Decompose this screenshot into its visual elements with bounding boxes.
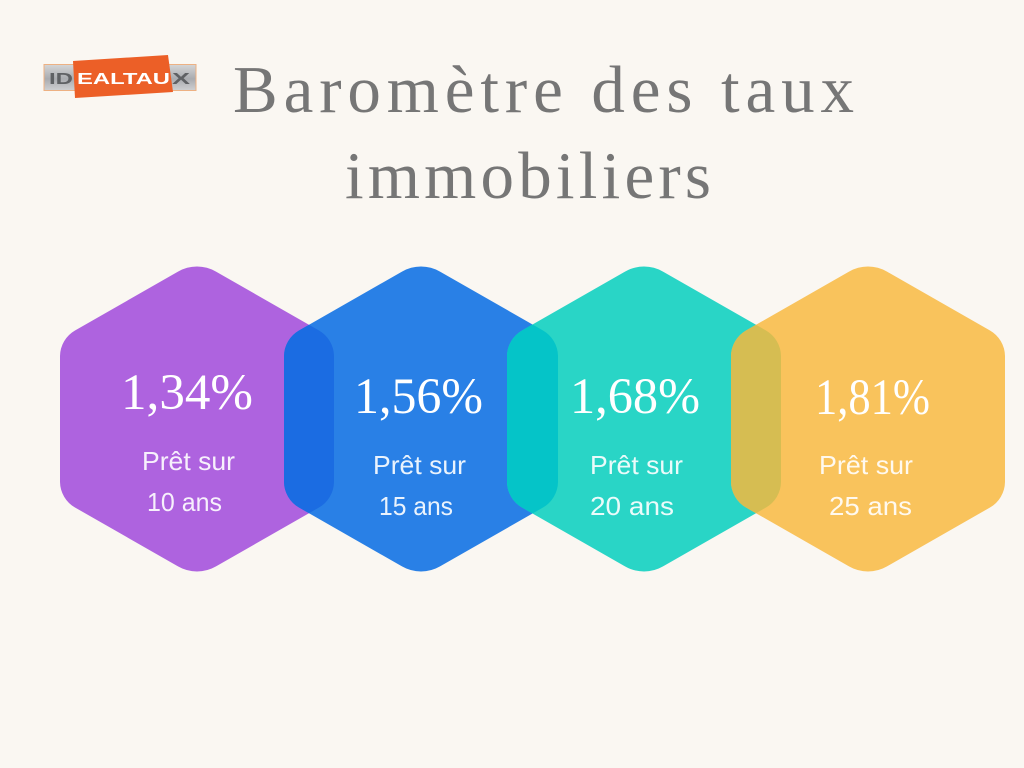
label: loan over 25 years: Prêt sur <box>819 450 913 480</box>
rate: 1,56%: 1,56% <box>354 369 483 425</box>
logo: Idealtaux: EALTAU <box>77 71 170 88</box>
label: loan over 10 years <box>142 446 235 517</box>
logo: Idealtaux <box>44 55 196 98</box>
label: loan over 10 years: Prêt sur <box>142 446 235 476</box>
label: loan over 10 years: 10 ans <box>147 487 222 517</box>
panel: 25-year rate hexagon <box>731 267 1005 571</box>
overlap: teal and orange hexagons <box>731 324 781 514</box>
rate: 1,34%: 1,34% <box>121 365 253 421</box>
title <box>233 53 854 213</box>
label: loan over 25 years: 25 ans <box>829 491 912 521</box>
label: loan over 20 years: Prêt sur <box>590 450 683 480</box>
label: loan over 20 years <box>590 450 683 521</box>
overlap: blue and teal hexagons <box>507 324 558 514</box>
label: loan over 20 years: 20 ans <box>590 491 674 521</box>
panel: 20-year rate hexagon <box>507 267 781 571</box>
panel: 10-year rate hexagon <box>60 267 334 571</box>
logo: Idealtaux: X <box>172 71 191 88</box>
label: loan over 15 years: Prêt sur <box>373 450 466 480</box>
title: immobiliers <box>345 139 711 213</box>
label: loan over 15 years <box>373 450 466 521</box>
rate: 1,81%: 1,81% <box>815 370 930 426</box>
label: loan over 15 years: 15 ans <box>379 491 453 521</box>
logo: Idealtaux: ID <box>49 71 73 88</box>
rate: 1,68%: 1,68% <box>570 369 700 425</box>
label: loan over 25 years <box>819 450 913 521</box>
title: Baromètre des taux <box>233 53 854 127</box>
panel: 15-year rate hexagon <box>284 267 558 571</box>
overlap: purple and blue hexagons <box>284 324 334 514</box>
